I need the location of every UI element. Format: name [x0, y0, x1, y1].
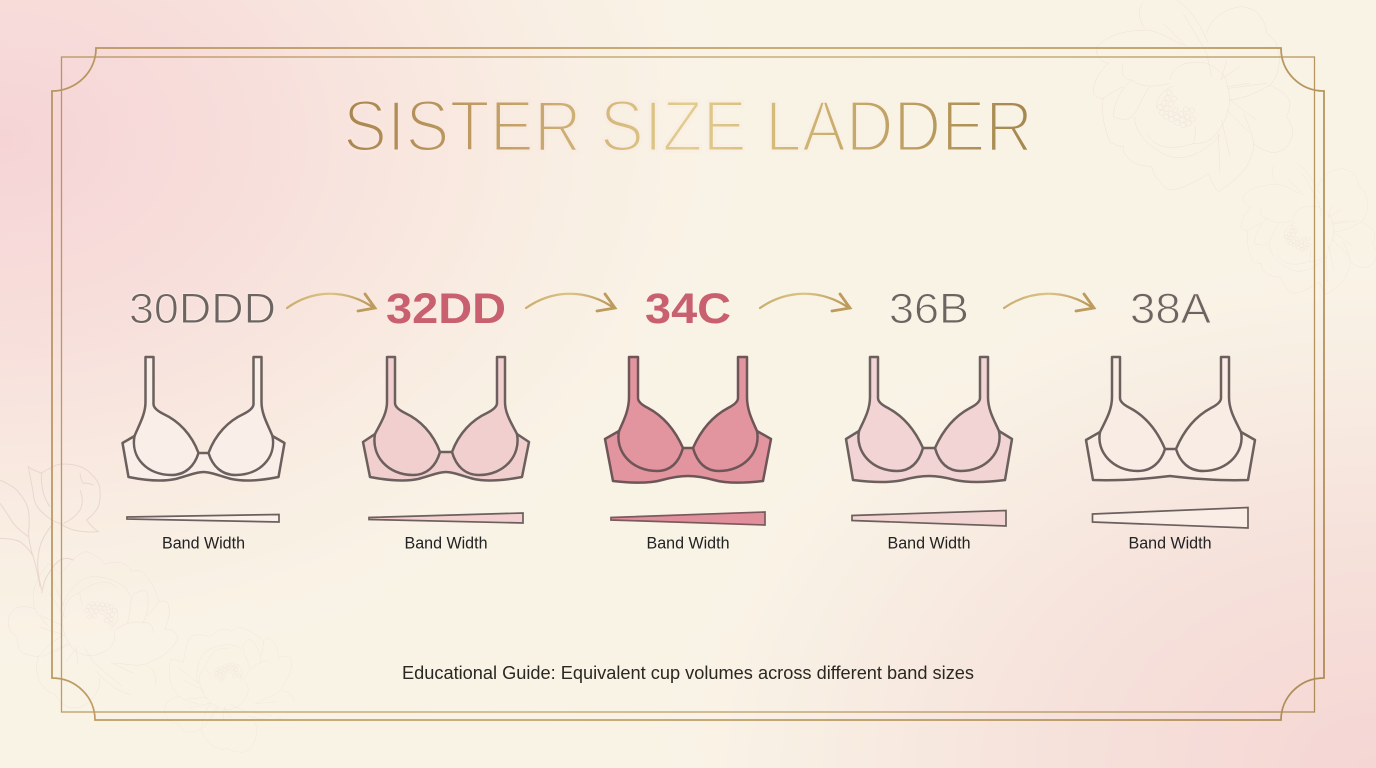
arrow: 30DDD to 32DD — [287, 294, 375, 311]
size label: 34C: 34C — [645, 285, 731, 333]
column: 36B — [846, 285, 1012, 552]
column: 32DD — [363, 285, 529, 552]
floral decoration: bottom left bud and leaves — [0, 464, 100, 593]
band width wedge — [1092, 508, 1248, 528]
column: 30DDD — [122, 285, 284, 552]
size label: 36B: 36B — [889, 285, 969, 333]
floral decoration: top right — [1093, 0, 1293, 192]
size label: 38A: 38A — [1130, 285, 1211, 333]
band width wedge — [611, 512, 765, 525]
band width label: Band Width — [646, 534, 730, 552]
column: 38A — [1086, 285, 1255, 552]
column: 34C — [605, 285, 771, 552]
footer caption: Educational Guide: Equivalent cup volumes across different band sizes — [402, 663, 974, 683]
band width wedge — [127, 514, 279, 522]
bra outline: 34C — [605, 357, 771, 483]
band width wedge — [852, 510, 1006, 526]
arrow: 36B to 38A — [1004, 294, 1094, 311]
title: SISTER SIZE LADDER — [343, 87, 1033, 167]
size label: 30DDD: 30DDD — [129, 285, 276, 333]
band width label: Band Width — [162, 534, 245, 552]
floral decoration: bottom left large peony — [0, 530, 193, 726]
size label: 32DD: 32DD — [386, 285, 506, 333]
band width wedge — [369, 513, 523, 523]
floral decoration: bottom peony — [140, 598, 316, 768]
band width label: Band Width — [888, 534, 970, 552]
floral decoration: right side — [1241, 164, 1376, 294]
bra outline: 38A — [1086, 357, 1255, 480]
bra outline: 36B — [846, 357, 1012, 482]
arrow: 34C to 36B — [760, 294, 850, 311]
band width label: Band Width — [1128, 534, 1212, 552]
bra outline: 30DDD — [122, 357, 284, 480]
band width label: Band Width — [404, 534, 488, 552]
bra outline: 32DD — [363, 357, 529, 480]
arrow: 32DD to 34C — [526, 294, 615, 311]
